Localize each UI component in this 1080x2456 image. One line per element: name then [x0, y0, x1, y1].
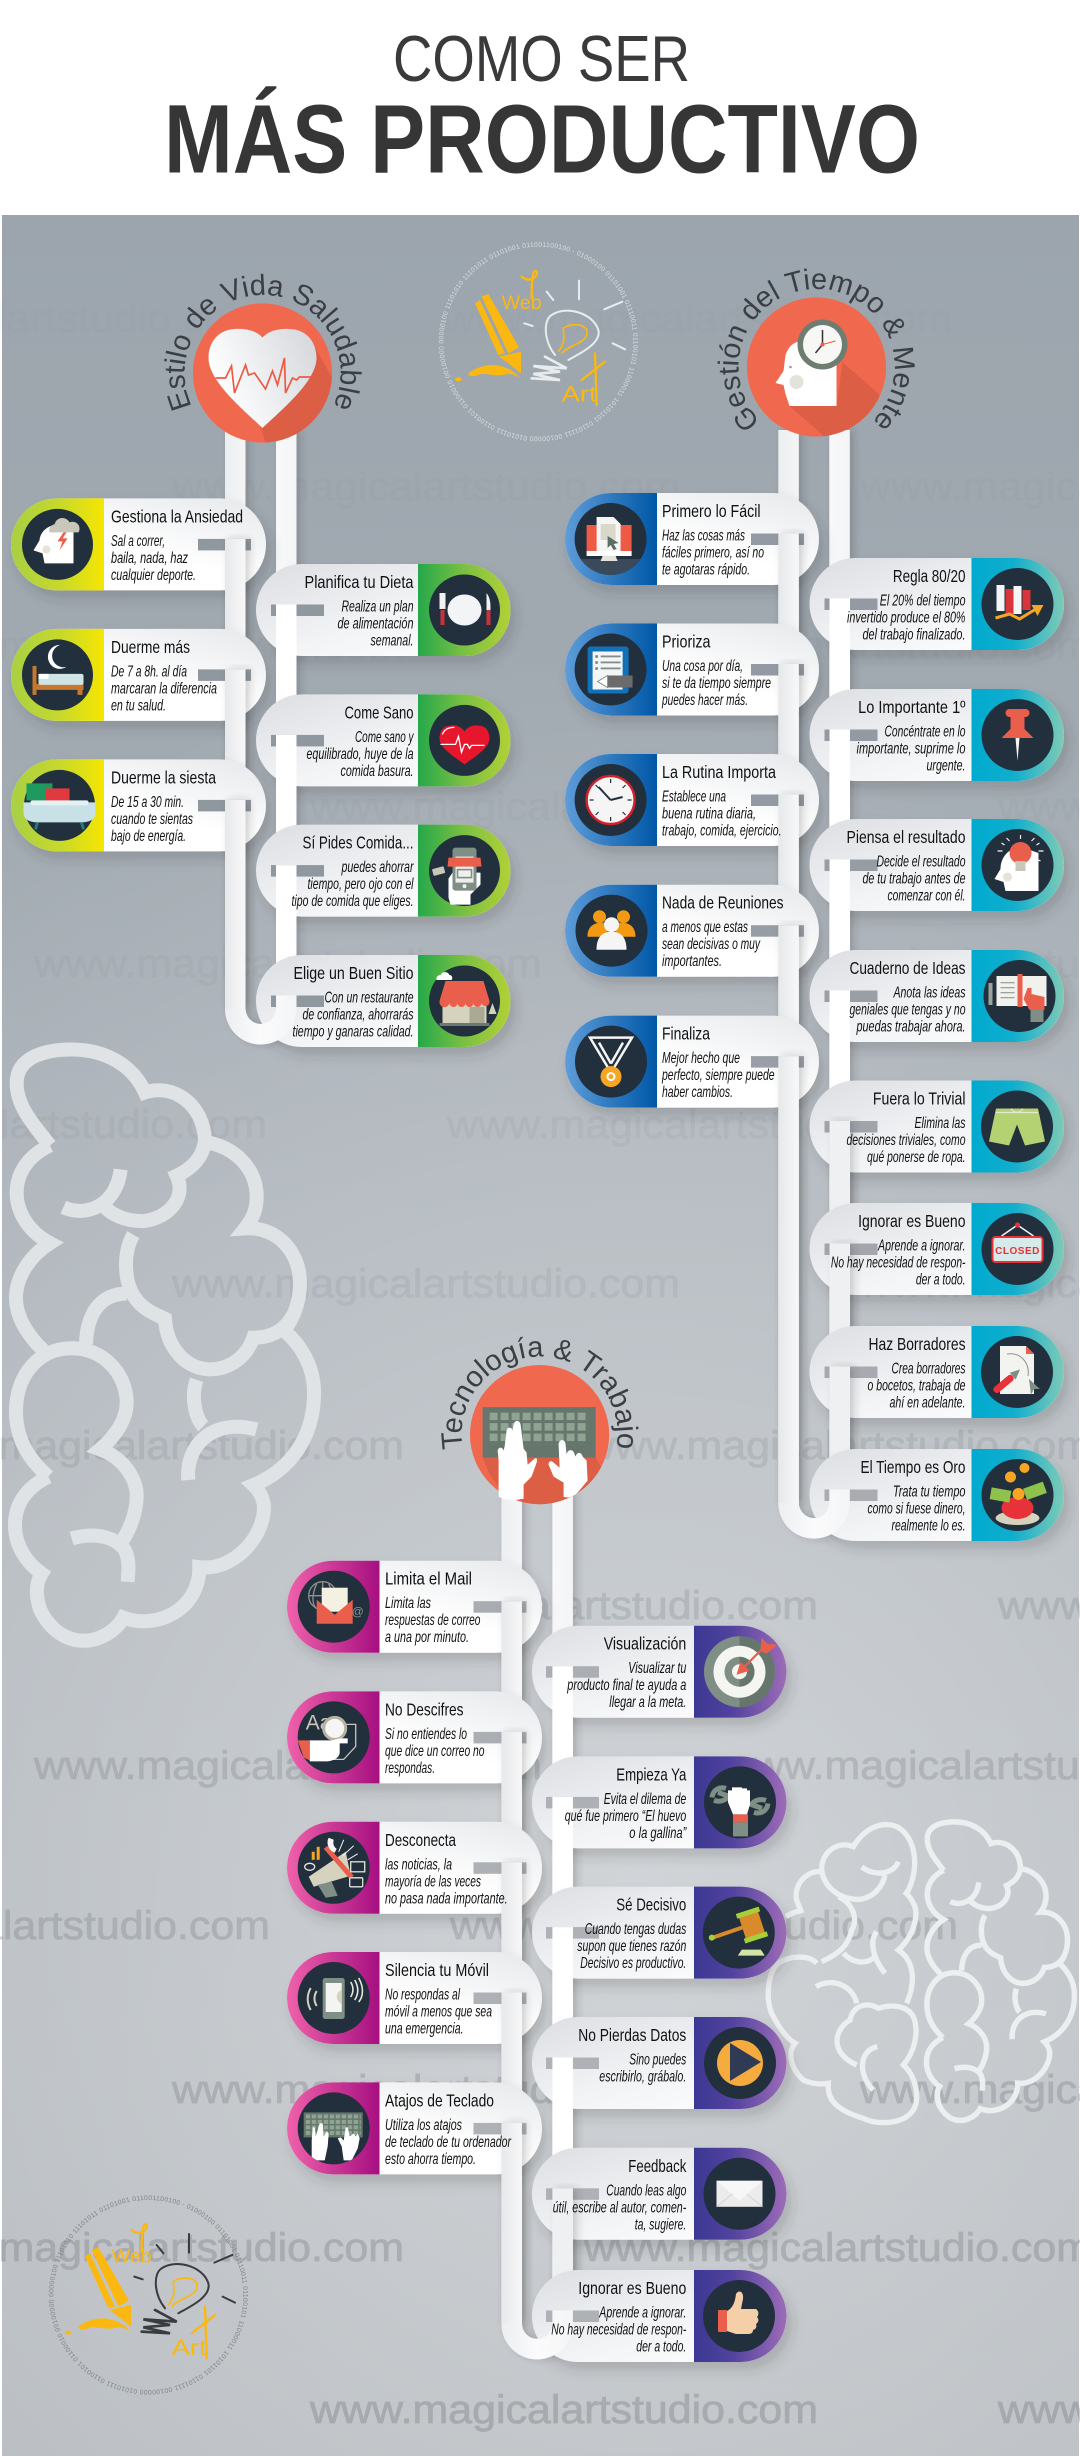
description: [306, 729, 414, 780]
description: producto final te ayuda a: [567, 1677, 686, 1694]
card: Primero lo Fácil: [565, 493, 819, 634]
description: puedes hacer más.: [661, 692, 748, 709]
icon: checklist and pencil: [588, 646, 633, 694]
description: Sino puedes: [629, 2052, 686, 2068]
description: trabajo, comida, ejercicio.: [662, 822, 782, 840]
panel: Tecnología y Trabajo: [287, 1336, 796, 2375]
title: Silencia tu Móvil: [385, 1960, 489, 1980]
description: escribirlo, grábalo.: [599, 2068, 686, 2086]
description: importantes.: [662, 953, 722, 970]
icon: open mail: @: [352, 1605, 364, 1619]
watermark: repeated website address: www.magicalartstudio.com: [33, 1744, 542, 1788]
title: Visualización: [604, 1634, 686, 1654]
title: Fuera lo Trivial: [873, 1088, 966, 1108]
description: bajo de energía.: [111, 828, 186, 845]
description: El 20% del tiempo: [880, 592, 966, 610]
card: El Tiempo es Oro: [810, 1449, 1064, 1541]
description: esto ahorra tiempo.: [385, 2151, 476, 2168]
description: [850, 984, 966, 1036]
card text: Elige un Buen Sitio: tiempo y ganaras calidad.: [292, 1024, 414, 1040]
card text: Elige un Buen Sitio: [292, 963, 414, 1040]
card: No Pierdas Datos: [532, 2017, 786, 2158]
description: mayoría de las veces: [385, 1873, 481, 1890]
description: Una cosa por día,: [662, 658, 743, 675]
description: no pasa nada importante.: [385, 1890, 508, 1907]
description: [385, 2117, 511, 2168]
description: qué fue primero “El huevo: [565, 1808, 686, 1825]
description: Si no entiendes lo: [385, 1726, 467, 1743]
card: Lo Importante 1º: [810, 689, 1064, 830]
title: Finaliza: [662, 1024, 710, 1044]
description: [662, 528, 764, 578]
description: útil, escribe al autor, comen-: [553, 2199, 686, 2216]
card: Empieza Ya: [532, 1756, 786, 1897]
description: Sal a correr,: [111, 533, 165, 550]
card: Limita el Mail: [287, 1561, 542, 1701]
watermark: repeated website address: www.magicalartstudio.com: [171, 465, 680, 509]
title: Duerme más: [111, 637, 190, 657]
icon: open mail: [309, 1582, 364, 1624]
description: [662, 919, 761, 970]
description: [111, 533, 196, 584]
card: Ignorar es Bueno (2): [532, 2270, 786, 2362]
description: Mejor hecho que: [662, 1050, 740, 1067]
description: importante, suprime lo: [856, 740, 966, 758]
description: [385, 1986, 492, 2038]
description: sean decisivas o muy: [662, 936, 761, 953]
card: Desconecta: [287, 1822, 542, 1962]
watermark: repeated website address: www.magicalartstudio.com: [583, 2226, 1080, 2270]
title: Cuaderno de Ideas: [850, 958, 966, 978]
description: puedas trabajar ahora.: [856, 1018, 966, 1036]
card text: El Tiempo es Oro: [860, 1457, 966, 1534]
card: Ignorar es Bueno: [810, 1203, 1064, 1344]
description: respondas.: [385, 1760, 435, 1777]
description: [661, 658, 771, 709]
description: de alimentación: [338, 616, 414, 632]
icon: play button: [717, 2040, 763, 2086]
description: [847, 592, 966, 644]
description: [856, 724, 966, 774]
description: de teclado de tu ordenador: [385, 2134, 511, 2151]
description: Cuando leas algo: [606, 2182, 686, 2199]
logo: Web Art top: Art: [562, 382, 597, 407]
description: [567, 1660, 686, 1711]
description: decisiones triviales, como: [846, 1132, 966, 1149]
description: [868, 1360, 966, 1412]
brain outline: small right: [768, 1822, 1074, 2123]
description: si te da tiempo siempre: [662, 675, 771, 692]
description: supon que tienes razón: [577, 1938, 686, 1955]
icon: monitor with document: [580, 517, 640, 575]
description: qué ponerse de ropa.: [867, 1149, 966, 1166]
heading badge: keyboard and hands: [470, 1365, 609, 1515]
panel: Gestión del Tiempo y Mente: [565, 268, 1074, 1554]
description: en tu salud.: [111, 697, 166, 714]
ribbon path: [225, 430, 296, 1044]
ribbon path: [501, 1490, 573, 2359]
watermark: repeated website address: www.magicalartstudio.com: [309, 785, 818, 829]
description: o la gallina”: [629, 1825, 687, 1842]
card text: Ignorar es Bueno (2): der a todo.: [636, 2338, 686, 2356]
description: tiempo, pero ojo con el: [308, 876, 414, 893]
description: [385, 1595, 480, 1646]
icon: closed sign: CLOSED: [995, 1246, 1040, 1257]
description: Come sano y: [355, 729, 414, 746]
icon: target with arrow: [704, 1636, 778, 1707]
description: Cuando tengas dudas: [585, 1921, 686, 1938]
card text: Elige un Buen Sitio: Elige un Buen Sitio: [294, 963, 414, 983]
ribbon U-turn: [225, 996, 296, 1044]
title: Nada de Reuniones: [662, 893, 784, 913]
card: Duerme más: [11, 629, 266, 769]
description: Establece una: [662, 788, 726, 806]
description: cuando te sientas: [111, 811, 193, 828]
description: [599, 2052, 686, 2086]
card: Fuera lo Trivial: [810, 1080, 1064, 1221]
card text: Elige un Buen Sitio: de confianza, ahorrarás: [302, 1006, 414, 1024]
logo: Web Art bottom: Web: [112, 2246, 152, 2267]
card: La Rutina Importa: [565, 754, 819, 894]
description: fáciles primero, así no: [662, 544, 764, 562]
description: a menos que estas: [662, 919, 748, 936]
description: [292, 859, 414, 910]
card: Nada de Reuniones: [565, 885, 819, 1025]
description: buena rutina diaria,: [662, 806, 756, 822]
icon: magnifier and hand: [298, 1711, 356, 1761]
title: Planifica tu Dieta: [304, 572, 414, 592]
description: [862, 854, 966, 904]
card: Sé Decisivo: [532, 1887, 786, 2027]
description: que dice un correo no: [385, 1743, 485, 1760]
description: Elimina las: [914, 1115, 966, 1132]
card: Cuaderno de Ideas: [810, 950, 1064, 1090]
title: Ignorar es Bueno: [858, 1211, 966, 1231]
card text: El Tiempo es Oro: como si fuese dinero,: [868, 1500, 966, 1518]
description: [111, 663, 217, 714]
title: Come Sano: [344, 702, 414, 722]
card text: Ignorar es Bueno (2): Ignorar es Bueno: [578, 2278, 686, 2298]
description: a una por minuto.: [385, 1629, 469, 1646]
description: [577, 1921, 686, 1972]
title: Sí Pides Comida...: [302, 833, 414, 853]
ribbon U-turn: [501, 2310, 573, 2359]
icon: draft document and pen: [991, 1346, 1040, 1395]
watermark: repeated website address: www.magicalartstudio.com: [446, 1103, 955, 1147]
watermark: repeated website address: www.magicalartstudio.com: [309, 1584, 818, 1628]
card: Come Sano: [256, 694, 510, 835]
description: del trabajo finalizado.: [862, 626, 966, 644]
icon: ringing phone: [308, 1978, 362, 2019]
title: Duerme la siesta: [111, 767, 216, 787]
title: Lo Importante 1º: [858, 697, 966, 717]
heading arc text: Tecnología & Trabajo: [441, 1336, 638, 1450]
description: de tu trabajo antes de: [862, 870, 966, 888]
title: Limita el Mail: [385, 1569, 472, 1589]
card: Finaliza: [565, 1016, 819, 1503]
icon: thumbs up: [718, 2292, 758, 2334]
description: Concéntrate en lo: [884, 724, 966, 740]
icon: gavel: [709, 1907, 768, 1956]
watermark: repeated website address: www.magicalartstudio.com: [583, 1424, 1080, 1468]
title: Primero lo Fácil: [662, 501, 760, 521]
description: Anota las ideas: [893, 984, 966, 1002]
description: Evita el dilema de: [604, 1791, 686, 1808]
watermark: repeated website address: www.magicalartstudio.com: [309, 2388, 818, 2432]
description: [338, 598, 414, 650]
icon: envelope: [716, 2181, 762, 2207]
watermark: repeated website address: www.magicalartstudio.com: [171, 2068, 680, 2112]
icon: head with storm cloud: [34, 518, 80, 563]
icon: medal: [590, 1038, 632, 1087]
description: haber cambios.: [662, 1084, 733, 1101]
icon: push pin: [1002, 709, 1034, 761]
card: Visualización: [532, 1626, 786, 1766]
card text: Ignorar es Bueno (2): Aprende a ignorar.: [599, 2304, 686, 2322]
icon: group of people: [588, 910, 636, 950]
icon: piggy bank and coins: [990, 1463, 1047, 1525]
description: Crea borradores: [892, 1360, 966, 1378]
description: Aprende a ignorar.: [877, 1238, 966, 1254]
description: Realiza un plan: [342, 598, 414, 616]
card: Planifica tu Dieta: [256, 564, 510, 704]
title: Regla 80/20: [893, 566, 966, 586]
title: Gestiona la Ansiedad: [111, 506, 243, 526]
description: Decisivo es productivo.: [580, 1955, 686, 1972]
description: [662, 788, 782, 840]
description: una emergencia.: [385, 2020, 464, 2038]
icon: shorts: [989, 1108, 1045, 1146]
description: puedes ahorrar: [341, 859, 414, 876]
panel: Estilo de Vida Saludable: [11, 274, 520, 1060]
title: Empieza Ya: [616, 1764, 686, 1784]
description: baila, nada, haz: [111, 550, 188, 567]
card: Piensa el resultado: [810, 819, 1064, 960]
title: No Descifres: [385, 1699, 464, 1719]
description: Limita las: [385, 1595, 431, 1612]
icon: magnifier and hand: Aa: [306, 1711, 332, 1734]
description: [846, 1115, 966, 1166]
description: invertido produce el 80%: [847, 610, 966, 626]
heading badge: heart: [192, 303, 332, 443]
description: [385, 1856, 508, 1907]
card: Haz Borradores: [810, 1326, 1064, 1466]
watermark: repeated website address: www.magicalartstudio.com: [33, 942, 542, 986]
ribbon path: [778, 430, 850, 1539]
card: Silencia tu Móvil: [287, 1952, 542, 2092]
title: COMO SER: [393, 22, 690, 95]
description: perfecto, siempre puede: [661, 1067, 775, 1084]
logo: Web Art top: Web: [502, 293, 542, 314]
watermark: repeated website address: www.magicalartstudio.com: [583, 624, 1080, 668]
watermark: repeated website address: www.magicalartstudio.com: [443, 297, 952, 341]
title: [164, 22, 920, 194]
heading arc text: Gestión del Tiempo & Mente: [718, 268, 915, 430]
description: te agotaras rápido.: [662, 562, 750, 578]
description: urgente.: [926, 758, 966, 774]
icon: plate and cutlery: [440, 593, 490, 626]
brain outline: large left: [15, 1049, 314, 1641]
description: Visualizar tu: [628, 1660, 686, 1677]
description: Decide el resultado: [876, 854, 966, 870]
icon: hand holding wrench: [712, 1787, 768, 1836]
card: Prioriza: [565, 624, 819, 764]
title: Feedback: [628, 2156, 686, 2176]
card: Atajos de Teclado: [287, 2082, 542, 2324]
logo: Web Art top: 01100100 - 01000100 01101001 01110011 01100101 11000011 10101101 01101111 00100000 01010111 01100101 01100010 00100000 00000100 11101010 11101011 01101001 01100110 00100000 0100: [438, 242, 638, 442]
description: geniales que tengas y no: [850, 1002, 966, 1018]
description: De 15 a 30 min.: [111, 794, 184, 811]
description: móvil a menos que sea: [385, 2004, 492, 2020]
title: Atajos de Teclado: [385, 2090, 494, 2110]
logo: Web Art bottom: 01100100 - 01000100 01101001 01110011 01100101 11000011 10101101 01101111 00100000 01010111 01100101 01100010 00100000 00000100 11101010 11101011 01101001 01100110 00100000 0100: [48, 2195, 248, 2395]
description: las noticias, la: [385, 1856, 452, 1873]
card: Gestiona la Ansiedad: [11, 498, 266, 639]
description: tipo de comida que eliges.: [292, 893, 414, 910]
card text: Ignorar es Bueno (2): No hay necesidad de respon-: [551, 2322, 686, 2338]
card: Regla 80/20: [810, 558, 1064, 698]
card: Duerme la siesta: [11, 759, 266, 1009]
icon: open book: [988, 974, 1046, 1022]
description: [111, 794, 193, 845]
icon: heart with pulse: [440, 725, 490, 764]
heading arc text: Estilo de Vida Saludable: [164, 274, 362, 411]
title: Haz Borradores: [868, 1334, 966, 1354]
icon: phone store: [432, 848, 482, 905]
description: Utiliza los atajos: [385, 2117, 462, 2134]
title: Prioriza: [662, 632, 711, 652]
watermark: repeated website address: www.magicalartstudio.com: [171, 1262, 680, 1306]
description: semanal.: [370, 632, 414, 650]
description: [553, 2182, 686, 2233]
icon: closed sign: [992, 1222, 1042, 1262]
title: Sé Decisivo: [616, 1895, 686, 1915]
card: Sí Pides Comida: [256, 825, 510, 965]
icon: wall clock: [587, 776, 635, 824]
card text: El Tiempo es Oro: realmente lo es.: [892, 1518, 966, 1534]
card: Elige un Buen Sitio: [256, 955, 510, 1047]
card: Feedback: [532, 2148, 786, 2288]
icon: restaurant storefront: [436, 972, 496, 1026]
icon: sofa: [24, 783, 96, 829]
icon: bar chart with arrow: [996, 585, 1044, 619]
description: comenzar con él.: [888, 888, 966, 904]
description: ahí en adelante.: [890, 1394, 966, 1412]
icon: head with lightbulb: [994, 835, 1044, 891]
heading badge: head with clock: [746, 297, 886, 437]
description: o bocetos, trabaja de: [868, 1378, 966, 1394]
description: marcaran la diferencia: [111, 680, 217, 697]
card text: Elige un Buen Sitio: Con un restaurante: [324, 990, 414, 1006]
description: cualquier deporte.: [111, 567, 196, 584]
description: equilibrado, huye de la: [306, 746, 414, 763]
description: No respondas al: [385, 1986, 460, 2004]
title: La Rutina Importa: [662, 762, 776, 782]
title: No Pierdas Datos: [578, 2025, 686, 2045]
description: No hay necesidad de respon-: [831, 1254, 966, 1272]
card text: El Tiempo es Oro: Trata tu tiempo: [893, 1484, 966, 1500]
description: [831, 1238, 966, 1288]
title: Piensa el resultado: [846, 827, 966, 847]
card text: Ignorar es Bueno (2): [551, 2278, 686, 2356]
title: Desconecta: [385, 1830, 456, 1850]
watermark: repeated website address: www.magicalartstudio.com: [449, 1904, 958, 1948]
description: [565, 1791, 687, 1842]
description: der a todo.: [916, 1272, 966, 1288]
card: No Descifres: [287, 1691, 542, 1832]
description: Haz las cosas más: [662, 528, 745, 544]
description: comida basura.: [340, 763, 414, 780]
description: ta, sugiere.: [635, 2216, 686, 2233]
title: MÁS PRODUCTIVO: [164, 84, 920, 194]
icon: bed and moon: [32, 645, 84, 695]
description: [661, 1050, 775, 1101]
logo: Web Art bottom: Art: [172, 2335, 207, 2360]
description: De 7 a 8h. al día: [111, 663, 187, 680]
description: llegar a la meta.: [609, 1694, 686, 1711]
ribbon U-turn: [778, 1490, 850, 1539]
icon: keyboard and hands: [304, 2112, 363, 2160]
description: [385, 1726, 485, 1777]
icon: megaphone and notifications: [305, 1838, 365, 1898]
card text: El Tiempo es Oro: El Tiempo es Oro: [860, 1457, 966, 1477]
description: respuestas de correo: [385, 1612, 480, 1629]
